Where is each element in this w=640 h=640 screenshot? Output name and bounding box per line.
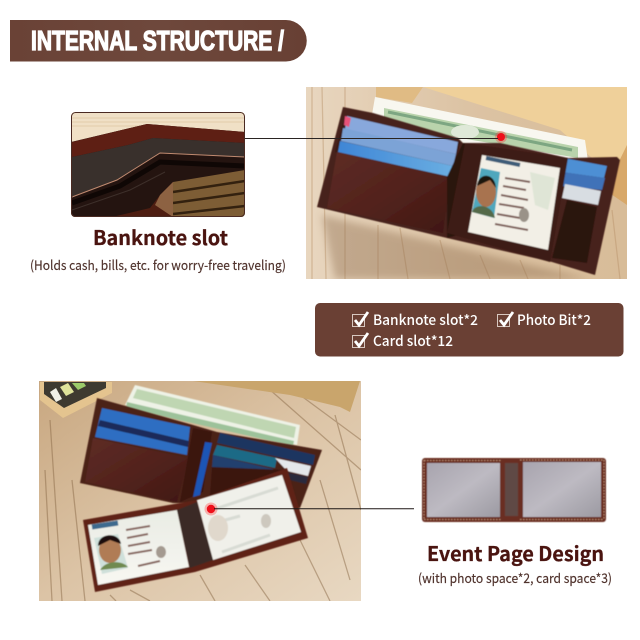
photo: insert with clear windows xyxy=(422,458,606,522)
photo: wallet with removable ID insert xyxy=(39,381,361,601)
icon: check 2 xyxy=(498,312,513,326)
banknotes xyxy=(125,385,300,446)
heading: banknote slot: Banknote slot xyxy=(93,222,229,251)
feature list panel: Photo Bit*2 xyxy=(517,310,591,330)
caption: event page design: (with photo space*2, card space*3) xyxy=(418,568,612,587)
feature list panel: Card slot*12 xyxy=(373,331,453,351)
title banner xyxy=(10,20,307,62)
ID insert open xyxy=(83,468,308,592)
photo: banknote slot close-up xyxy=(71,112,245,217)
heading: event page design: Event Page Design xyxy=(427,538,604,567)
photo: open wallet with banknotes and ID xyxy=(306,87,627,279)
crate top xyxy=(193,381,360,412)
callout line: event page xyxy=(214,508,414,510)
icon: check 3 xyxy=(352,333,368,348)
icon: check 1 xyxy=(352,312,368,326)
callout dot xyxy=(495,131,507,143)
callout line: banknote slot xyxy=(245,138,498,140)
crate corner xyxy=(40,382,112,418)
caption: banknote slot: (Holds cash, bills, etc. for worry-free traveling) xyxy=(30,255,286,274)
feature list panel: Banknote slot*2 xyxy=(373,310,478,330)
feature list panel xyxy=(315,303,624,356)
title banner: INTERNAL STRUCTURE / xyxy=(31,25,284,56)
callout dot xyxy=(204,502,218,516)
